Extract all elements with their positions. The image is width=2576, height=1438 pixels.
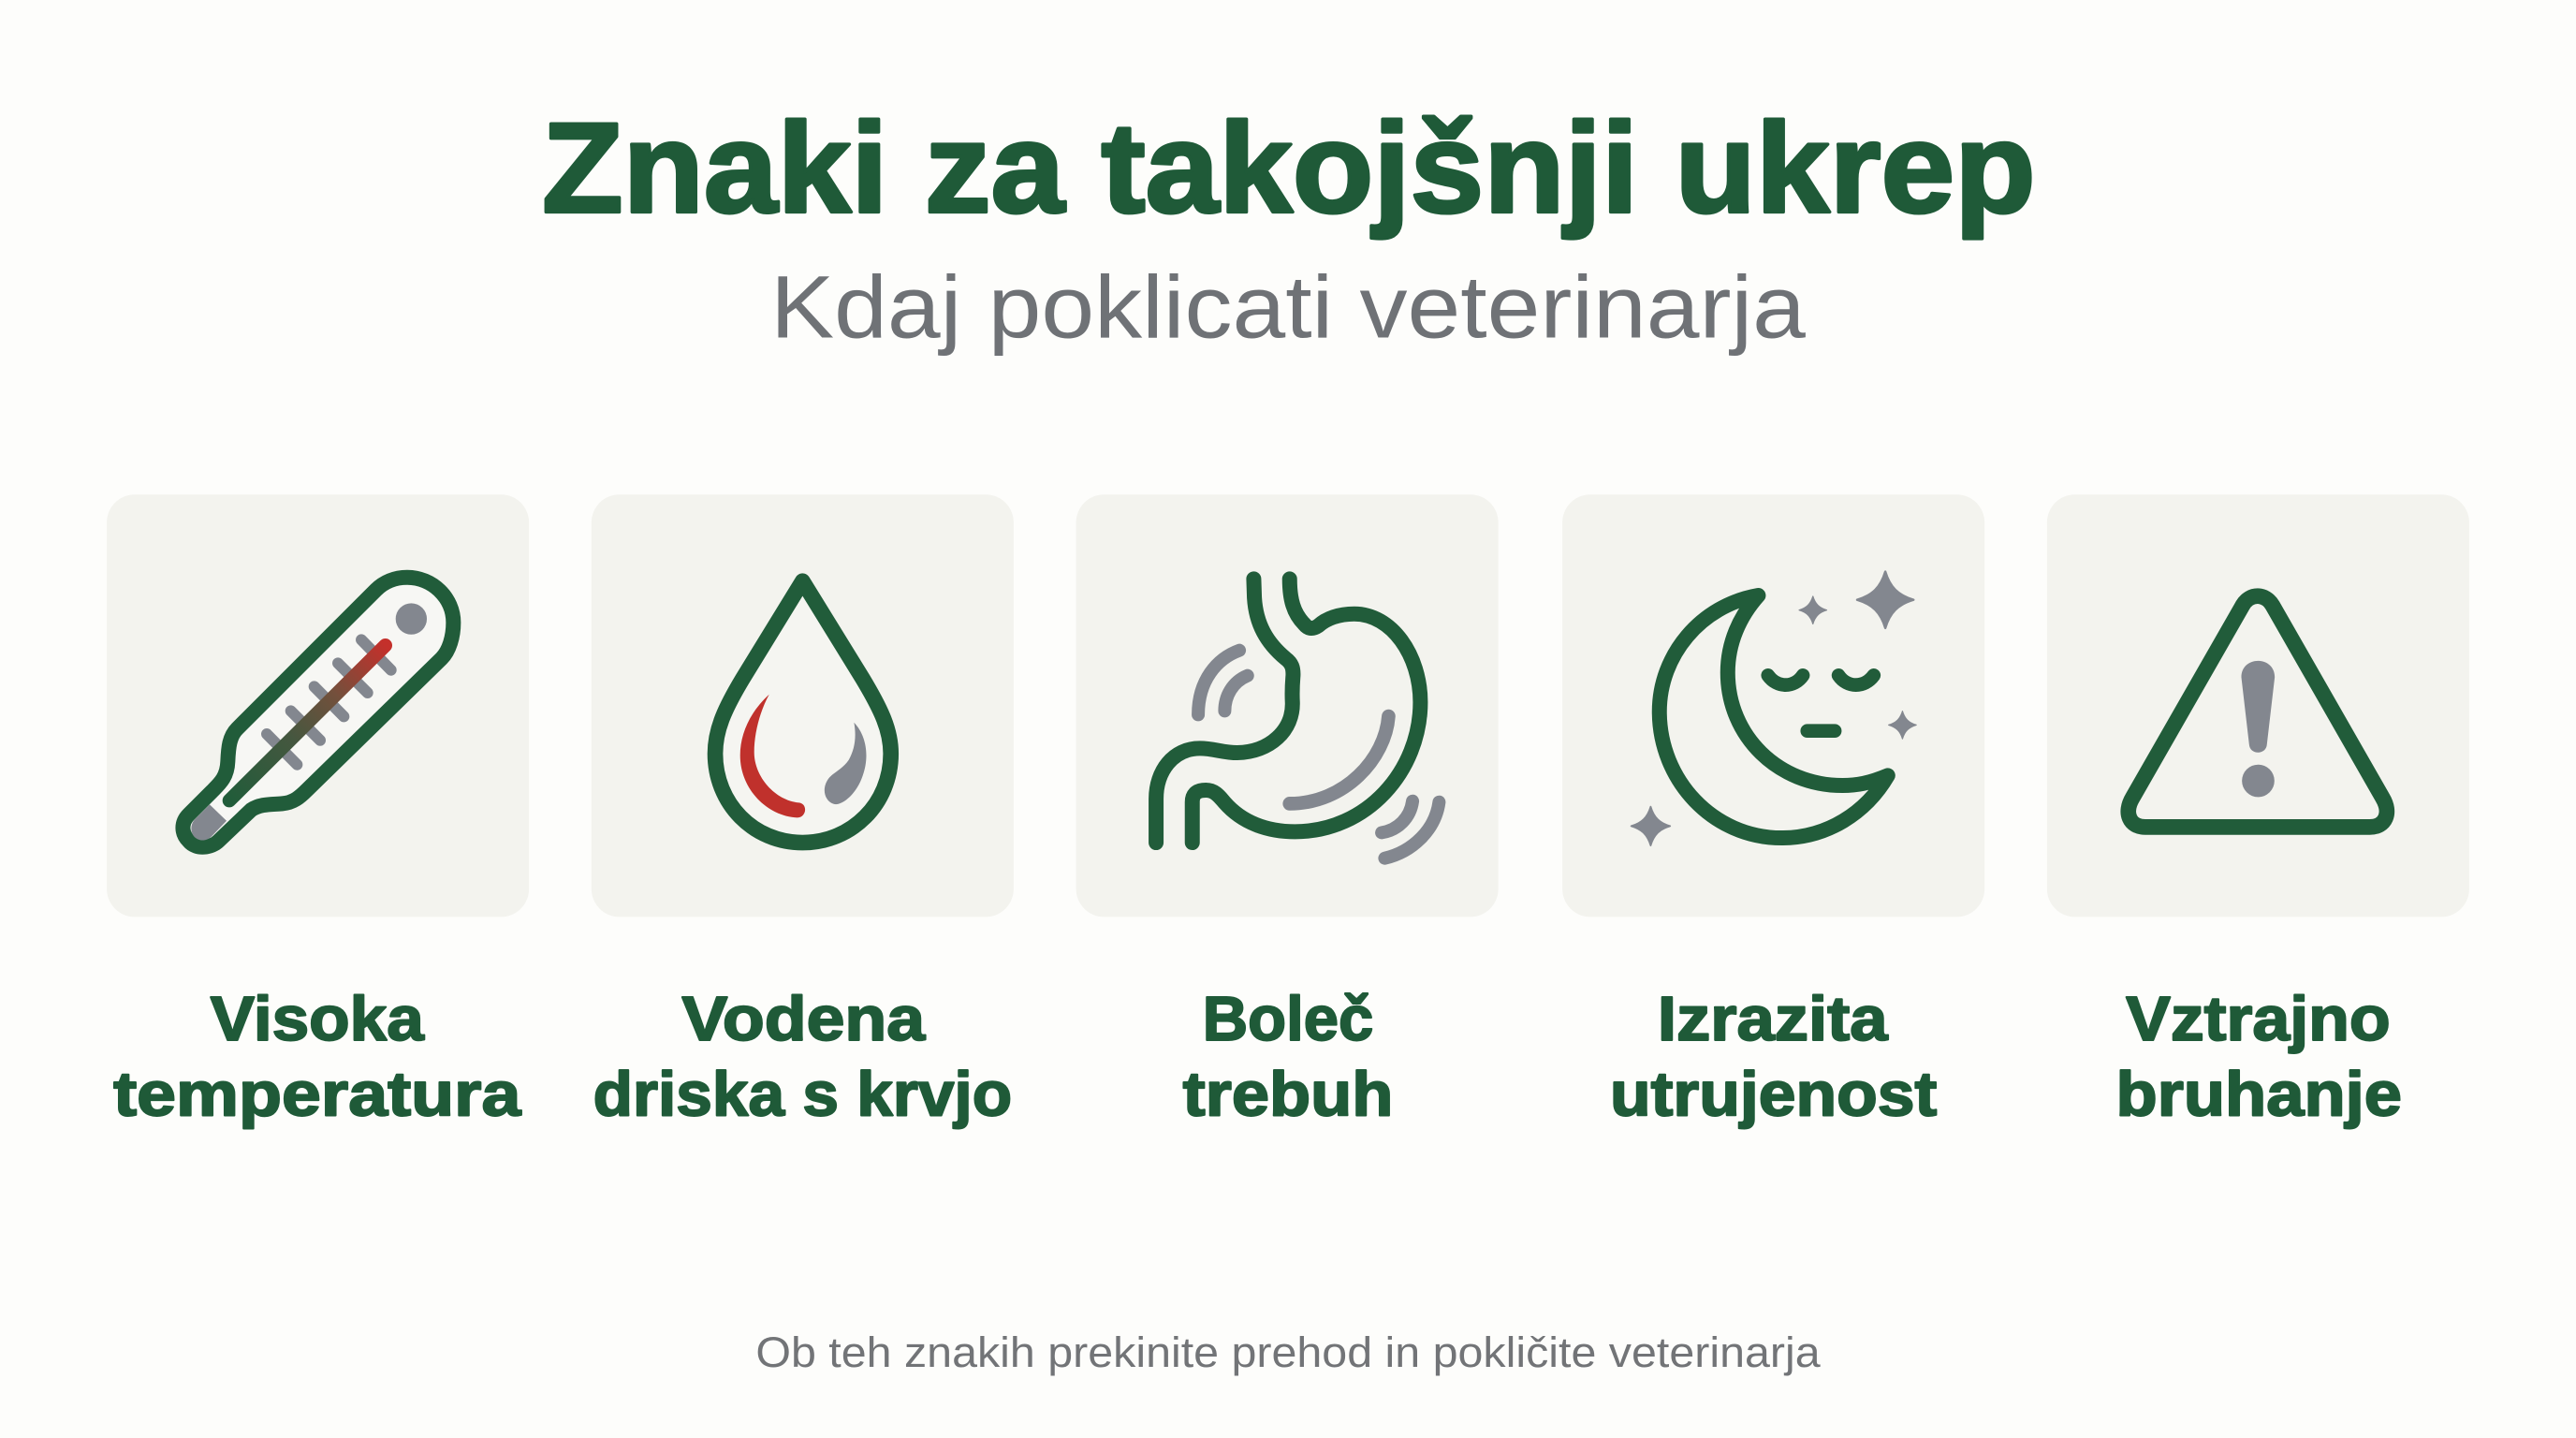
label [1610,985,1937,1130]
icon: sleeping moon [1632,572,1916,845]
subtitle: Kdaj poklicati veterinarja [770,258,1806,358]
label [2116,985,2402,1130]
icon: warning triangle [2129,596,2387,827]
icon: drop [715,581,891,843]
label [593,985,1012,1130]
label: Visoka [211,985,425,1054]
label: Boleč [1203,985,1373,1054]
label [113,985,521,1130]
panel: high temperature [107,494,529,1130]
icon: thermometer [183,578,453,847]
panel: abdominal pain [1076,494,1499,1130]
icon: stomach [1156,579,1439,858]
label: bruhanje [2116,1061,2402,1130]
title: Znaki za takojšnji ukrep [542,96,2036,240]
panel: persistent vomiting [2047,494,2469,1130]
label: Vztrajno [2126,985,2391,1054]
label: driska s krvjo [593,1061,1012,1130]
label: Vodena [681,985,926,1054]
footer note: Ob teh znakih prekinite prehod in pokličite veterinarja [755,1328,1821,1376]
label: utrujenost [1610,1061,1937,1130]
panel: watery diarrhea with blood [592,494,1014,1130]
panel: extreme fatigue [1562,494,1984,1130]
label: temperatura [113,1061,521,1130]
label: Izrazita [1658,985,1889,1054]
label: trebuh [1183,1061,1393,1130]
label [1183,985,1393,1130]
